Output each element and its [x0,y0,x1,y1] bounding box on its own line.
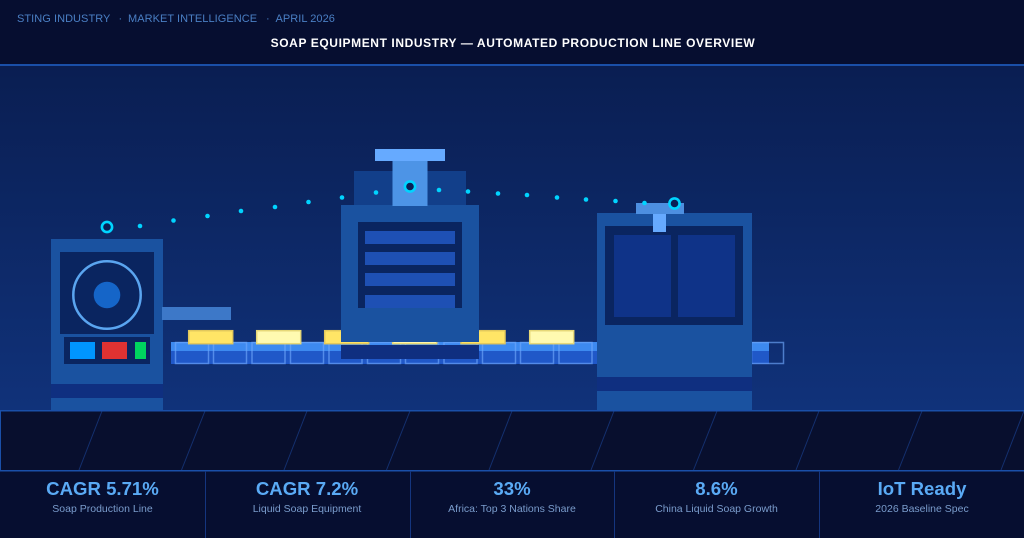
stat: liquid soap equipment: Liquid Soap Equipment [253,503,361,515]
header eyebrow: · [118,13,122,25]
header eyebrow: · [266,13,270,25]
header eyebrow: APRIL 2026 [276,13,335,25]
stat: iot [875,478,969,515]
stat: liquid soap equipment [253,478,361,515]
stat: soap production line: CAGR 5.71% [46,478,159,499]
stat: soap production line: Soap Production Line [52,503,153,515]
stats band [0,470,1024,538]
press window [358,222,462,308]
header eyebrow: MARKET INTELLIGENCE [128,13,257,25]
path node rings [102,181,680,232]
motion path dots [138,188,647,228]
press cap [375,149,445,161]
stat: iot: IoT Ready [878,478,967,499]
feed arm [162,307,231,320]
soap bars [189,331,574,344]
mixer window [60,252,154,334]
stat: africa [448,478,576,515]
stat: liquid soap equipment: CAGR 7.2% [256,478,359,499]
packer window [605,226,743,325]
stat: africa: Africa: Top 3 Nations Share [448,503,576,515]
control panel [64,337,150,364]
stat: china [655,478,778,515]
packer stem [653,214,666,232]
machine 3: packer [597,203,752,410]
machine 2: press [341,149,479,359]
conveyor belt [171,342,784,364]
stat: soap production line [46,478,159,515]
press base [341,345,479,359]
stat: africa: 33% [493,478,531,499]
stat: china: China Liquid Soap Growth [655,503,778,515]
packer cap [636,203,684,214]
mixer drum [73,261,141,329]
stat: china: 8.6% [695,478,738,499]
header eyebrow: STING INDUSTRY [17,13,111,25]
header band [0,0,1024,66]
factory floor [0,410,1024,471]
press stem [392,161,428,206]
title: SOAP EQUIPMENT INDUSTRY — AUTOMATED PRODUCTION LINE OVERVIEW [271,36,755,50]
scene background [0,66,1024,411]
machine 1: mixer [51,239,163,410]
stat: iot: 2026 Baseline Spec [875,503,969,515]
